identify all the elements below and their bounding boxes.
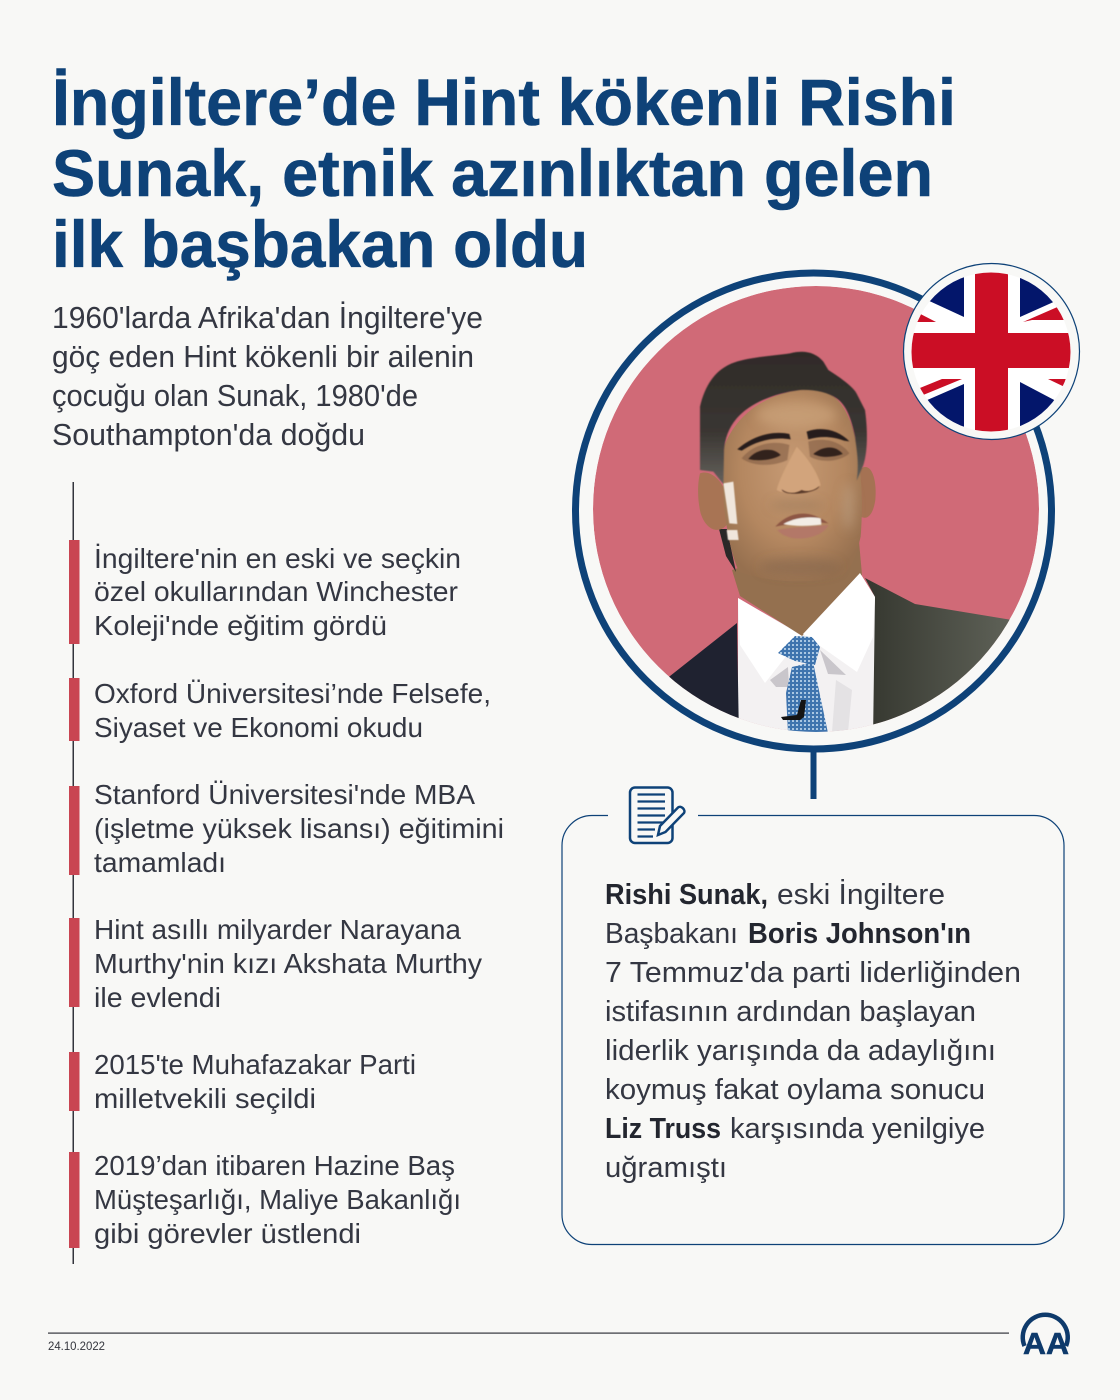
tie <box>778 636 828 733</box>
brows <box>737 429 849 451</box>
item: 2015: milletvekili seçildi <box>94 1083 316 1114</box>
box text: liderlik yarışında da adaylığını <box>605 1035 996 1067</box>
box text: eski İngiltere <box>777 878 945 911</box>
mouth <box>775 514 828 539</box>
item: Winchester: Koleji'nde eğitim gördü <box>94 610 387 641</box>
item: Winchester: İngiltere'nin en eski ve seçkin <box>94 543 461 574</box>
connector <box>810 752 816 799</box>
face <box>723 388 862 581</box>
shirt <box>738 573 875 740</box>
item: 2019: gibi görevler üstlendi <box>94 1218 361 1249</box>
title: Sunak, etnik azınlıktan gelen <box>52 136 933 210</box>
intro text: 1960'larda Afrika'dan İngiltere'ye <box>52 300 483 335</box>
box text: Liz Truss <box>605 1113 721 1145</box>
item: marriage: ile evlendi <box>94 982 221 1013</box>
box text: koymuş fakat oylama sonucu <box>605 1074 985 1106</box>
item: Oxford: Siyaset ve Ekonomi okudu <box>94 712 423 743</box>
eyes <box>748 447 843 460</box>
item: 2019: 2019’dan itibaren Hazine Baş <box>94 1150 455 1181</box>
head <box>698 352 876 581</box>
item: marriage: Hint asıllı milyarder Narayana <box>94 914 461 945</box>
item: Oxford: Oxford Üniversitesi’nde Felsefe, <box>94 678 491 709</box>
portrait photo <box>593 286 1039 740</box>
item: Stanford: (işletme yüksek lisansı) eğitimini <box>94 813 504 844</box>
title: İngiltere’de Hint kökenli Rishi <box>52 65 956 139</box>
logo: AA: AA <box>1023 1326 1069 1361</box>
suit right <box>865 578 1010 724</box>
timeline <box>69 482 504 1264</box>
collar <box>738 573 875 683</box>
item: Winchester <box>69 540 461 644</box>
item: Stanford <box>69 779 504 878</box>
title: ilk başbakan oldu <box>52 207 588 281</box>
item: marriage <box>69 914 482 1013</box>
neck <box>732 542 862 636</box>
shirt shadows <box>770 650 852 732</box>
item: Stanford: Stanford Üniversitesi'nde MBA <box>94 779 475 810</box>
box text: istifasının ardından başlayan <box>605 996 976 1028</box>
box text <box>605 878 1021 1184</box>
item: 2015 <box>69 1049 416 1114</box>
title <box>52 65 956 281</box>
item: Winchester: özel okullarından Winchester <box>94 576 458 607</box>
intro text: Southampton'da doğdu <box>52 417 365 452</box>
item: Stanford: tamamladı <box>94 847 226 878</box>
item: 2019 <box>69 1150 461 1249</box>
icon: document and pencil <box>630 788 684 843</box>
box text: Rishi Sunak, <box>605 879 768 911</box>
flag red diagonals <box>917 307 1066 395</box>
footer rule <box>48 1332 1009 1334</box>
microphone <box>781 700 806 720</box>
item: 2019: Müşteşarlığı, Maliye Bakanlığı <box>94 1184 461 1215</box>
portrait ring <box>576 273 1052 749</box>
nose <box>777 447 821 493</box>
intro text: göç eden Hint kökenli bir ailenin <box>52 339 474 374</box>
box text: 7 Temmuz'da parti liderliğinden <box>605 957 1021 989</box>
intro text: çocuğu olan Sunak, 1980'de <box>52 378 418 413</box>
item: 2015: 2015'te Muhafazakar Parti <box>94 1049 416 1080</box>
item: marriage: Murthy'nin kızı Akshata Murthy <box>94 948 482 979</box>
suit left <box>669 623 739 718</box>
intro text <box>52 300 483 452</box>
box text: uğramıştı <box>605 1152 727 1184</box>
date: 24.10.2022 <box>48 1341 105 1353</box>
face shading <box>757 402 854 575</box>
box text: karşısında yenilgiye <box>730 1113 985 1145</box>
ears <box>698 472 727 530</box>
cheek highlight <box>723 482 739 540</box>
box text: Başbakanı <box>605 918 738 950</box>
flag blue fields <box>928 277 1054 427</box>
back hair <box>719 529 736 572</box>
item: Oxford <box>69 678 491 743</box>
eye sockets <box>742 440 849 465</box>
UK flag badge <box>904 260 1080 440</box>
box text: Boris Johnson'ın <box>748 918 971 950</box>
info box <box>562 788 1064 1245</box>
hair <box>700 352 867 484</box>
